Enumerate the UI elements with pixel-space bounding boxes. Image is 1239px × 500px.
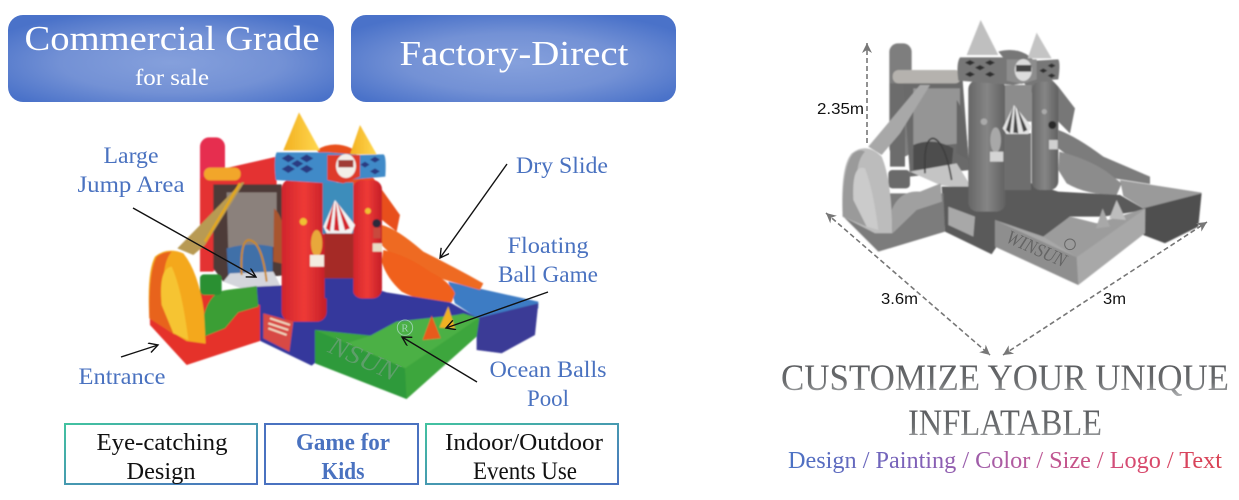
feature box: Eye-catching Design: Design	[126, 459, 196, 485]
heading: Customize your unique inflatable: INFLATABLE	[908, 403, 1102, 444]
arrow: to jump area	[133, 208, 256, 277]
illustration: colour inflatable bouncer: R	[401, 324, 409, 335]
dimension arrow: length	[826, 213, 990, 355]
dimension label: 3m: 3m	[1103, 291, 1126, 308]
illustration: grayscale inflatable with dimensions	[842, 20, 1202, 285]
dimension arrow: height	[866, 43, 868, 143]
dimension arrow: width	[1003, 222, 1207, 355]
arrow: to floating ball game	[446, 292, 548, 328]
feature box: Game for Kids: Kids	[322, 459, 364, 485]
label: Floating Ball Game	[498, 233, 598, 287]
label: Ocean Balls Pool	[490, 357, 607, 411]
feature box: Indoor/Outdoor Events Use	[426, 424, 618, 485]
button: Factory-Direct: Factory-Direct	[400, 34, 629, 73]
arrow: to ocean balls pool	[402, 337, 477, 382]
label: Large Jump Area	[78, 143, 184, 197]
illustration: colour inflatable bouncer	[149, 112, 538, 399]
label: Ocean Balls Pool: Pool	[527, 386, 569, 411]
illustration: grayscale inflatable with dimensions: WINSUN	[1003, 227, 1070, 272]
button: Commercial Grade for sale: for sale	[135, 65, 209, 90]
button: Commercial Grade for sale	[8, 15, 334, 102]
illustration: colour inflatable bouncer: NSUN	[323, 330, 405, 388]
arrow: to dry slide	[440, 164, 507, 258]
label: Entrance: Entrance	[78, 364, 166, 389]
label: Ocean Balls Pool: Ocean Balls	[490, 357, 607, 382]
feature box: Game for Kids: Game for	[296, 430, 390, 456]
dimension label: 2.35m: 2.35m	[817, 101, 864, 118]
dimension label: 3.6m: 3.6m	[881, 291, 918, 308]
label: Dry Slide: Dry Slide	[516, 153, 608, 178]
feature box: Game for Kids	[265, 424, 418, 485]
feature box: Eye-catching Design	[65, 424, 257, 485]
feature box: Indoor/Outdoor Events Use: Indoor/Outdoor	[445, 430, 603, 456]
label: Floating Ball Game: Floating	[508, 233, 589, 258]
button: Factory-Direct	[351, 15, 676, 102]
label: Floating Ball Game: Ball Game	[498, 262, 598, 287]
button: Commercial Grade for sale: Commercial Grade	[24, 19, 320, 58]
label: Large Jump Area: Jump Area	[78, 172, 184, 197]
arrow: to entrance	[121, 345, 158, 357]
heading: Customize your unique inflatable	[781, 358, 1229, 444]
label: Large Jump Area: Large	[104, 143, 158, 168]
feature box: Indoor/Outdoor Events Use: Events Use	[473, 458, 577, 485]
feature box: Eye-catching Design: Eye-catching	[96, 430, 228, 456]
tagline: customization options: Design / Painting / Color / Size / Logo / Text	[788, 448, 1222, 474]
